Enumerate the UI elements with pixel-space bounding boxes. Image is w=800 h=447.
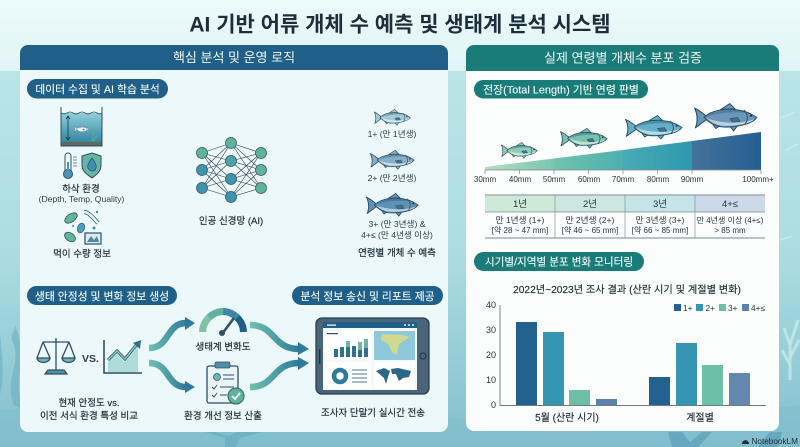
heading: transmission and report: 분석 정보 송신 및 리포트 제공 [300,290,435,303]
text: versus: VS. [82,353,99,365]
chart: length scale wedge: 70mm [612,175,634,184]
legend: 2+ [706,303,715,313]
table: age classes: [약 66 ~ 85 mm] [632,225,688,235]
icon: plankton food organisms [63,211,101,244]
text: age 2+: 2+ (만 2년생) [368,173,417,183]
table: age classes: [약 46 ~ 65 mm] [562,225,618,235]
chart: bar chart by age class: 0 [491,400,496,410]
panel: actual age-specific population validation [466,45,779,431]
chart: bar chart by age class: 계절별 [686,411,714,424]
panel header: 핵심 분석 및 운영 로직 [173,50,295,65]
chart: length scale wedge: 50mm [543,175,565,184]
table: age classes [485,195,765,238]
text: habitat environment: 하삭 환경 [62,183,100,195]
title: AI 기반 어류 개체 수 예측 및 생태계 분석 시스템 [189,14,611,36]
text: stability comparison: 이전 서식 환경 특성 비교 [40,410,138,422]
chart: bar chart by age class: 30 [486,325,496,335]
heading: stability and change information [27,286,177,305]
icon: tablet dashboard [316,318,429,394]
icon: fish size progression [501,104,757,158]
arrow: to improvement info [149,363,195,393]
heading: monitoring by period and region: 시기별/지역별 분포 변화 모니터링 [485,256,633,268]
text: population forecast by age: 연령별 개체 수 예측 [358,247,436,259]
text: age 3+ and 4+: 4+≤ (만 4년생 이상) [361,230,433,240]
table: age classes: 4+≤ [722,199,738,210]
heading: data collection [27,79,168,98]
table: age classes: [약 28 ~ 47 mm] [492,225,548,235]
chart: length scale wedge: 80mm [647,175,669,184]
table: age classes: 만 3년생 (3+) [636,215,685,225]
chart: length scale wedge: 60mm [578,175,600,184]
text: habitat environment: (Depth, Temp, Quality) [39,194,125,204]
heading: transmission and report [292,286,443,305]
chart: length scale wedge: 100mm+ [742,175,774,184]
icon: neural network [196,138,266,202]
chart: bar chart by age class: 40 [486,300,496,310]
icon: thermometer and water quality shield [64,153,101,178]
chart: length scale wedge: 40mm [509,175,531,184]
legend [674,303,765,313]
chart: length scale wedge [474,132,774,184]
icon: balance scale [37,338,75,374]
watermark: NotebookLM: NotebookLM [752,437,798,446]
panel: core analysis and operating logic [20,45,448,432]
text: habitat environment [39,183,125,204]
text: environmental improvement information: 환경 개선 정보 산출 [184,410,262,422]
text: age 3+ and 4+: 3+ (만 3년생) & [369,219,426,229]
text: age 1+: 1+ (만 1년생) [368,129,417,139]
legend: 4+≤ [751,303,765,313]
table: age classes: 만 2년생 (2+) [566,215,615,225]
table: age classes: 만 4년생 이상 (4+≤) [697,215,764,225]
text: stability comparison [40,398,138,422]
text: ecosystem change: 생태계 변화도 [195,341,251,353]
chart: length scale wedge: 30mm [474,175,496,184]
table: age classes: > 85 mm [714,226,746,235]
arrow: improvement info to tablet [250,357,309,387]
panel header [466,45,779,71]
icon: fish 2+ [370,150,414,169]
chart: length scale wedge: 90mm [681,175,703,184]
icon: clipboard with checkmark [207,362,244,404]
legend: 1+ [683,303,693,313]
icon: fish 3+ [367,193,418,216]
text: artificial neural network: 인공 신경망 (AI) [199,215,263,227]
table: age classes: 2년 [583,199,597,210]
chart: bar chart by age class: 5월 (산란 시기) [535,412,599,424]
chart: bar chart by age class: 10 [486,375,496,385]
legend: 3+ [728,303,738,313]
table: age classes: 만 1년생 (1+) [496,215,545,225]
icon: ecosystem gauge [202,312,244,336]
heading: total length based age determination [474,80,648,98]
arrow: ecosystem change to tablet [250,325,309,355]
icon: water tank [61,107,102,146]
heading: total length based age determination: 전장(Total Length) 기반 연령 판별 [483,84,639,96]
panel header: 실제 연령별 개체수 분포 검증 [544,50,702,66]
chart: bar chart by age class: 20 [486,350,496,360]
text: food abundance: 먹이 수량 정보 [53,248,111,260]
table: age classes: 1년 [513,199,527,210]
chart: bar chart by age class [486,300,766,424]
panel header [20,45,448,70]
heading: data collection: 데이터 수집 및 AI 학습 분석 [35,83,160,96]
arrow: to ecosystem change [149,317,195,348]
text: real-time transmission: 조사자 단말기 실시간 전송 [321,407,425,419]
table: age classes: 3년 [653,199,667,210]
text: age 3+ and 4+ [361,219,433,240]
icon: fish 1+ [374,109,410,125]
text: chart title: 2022년~2023년 조사 결과 (산란 시기 및 계절별 변화) [513,283,741,296]
icon: growth line chart [104,340,142,373]
heading: monitoring by period and region [474,252,644,271]
heading: stability and change information: 생태 안정성 및 변화 정보 생성 [35,290,169,303]
text: stability comparison: 현재 안정도 vs. [58,398,120,409]
